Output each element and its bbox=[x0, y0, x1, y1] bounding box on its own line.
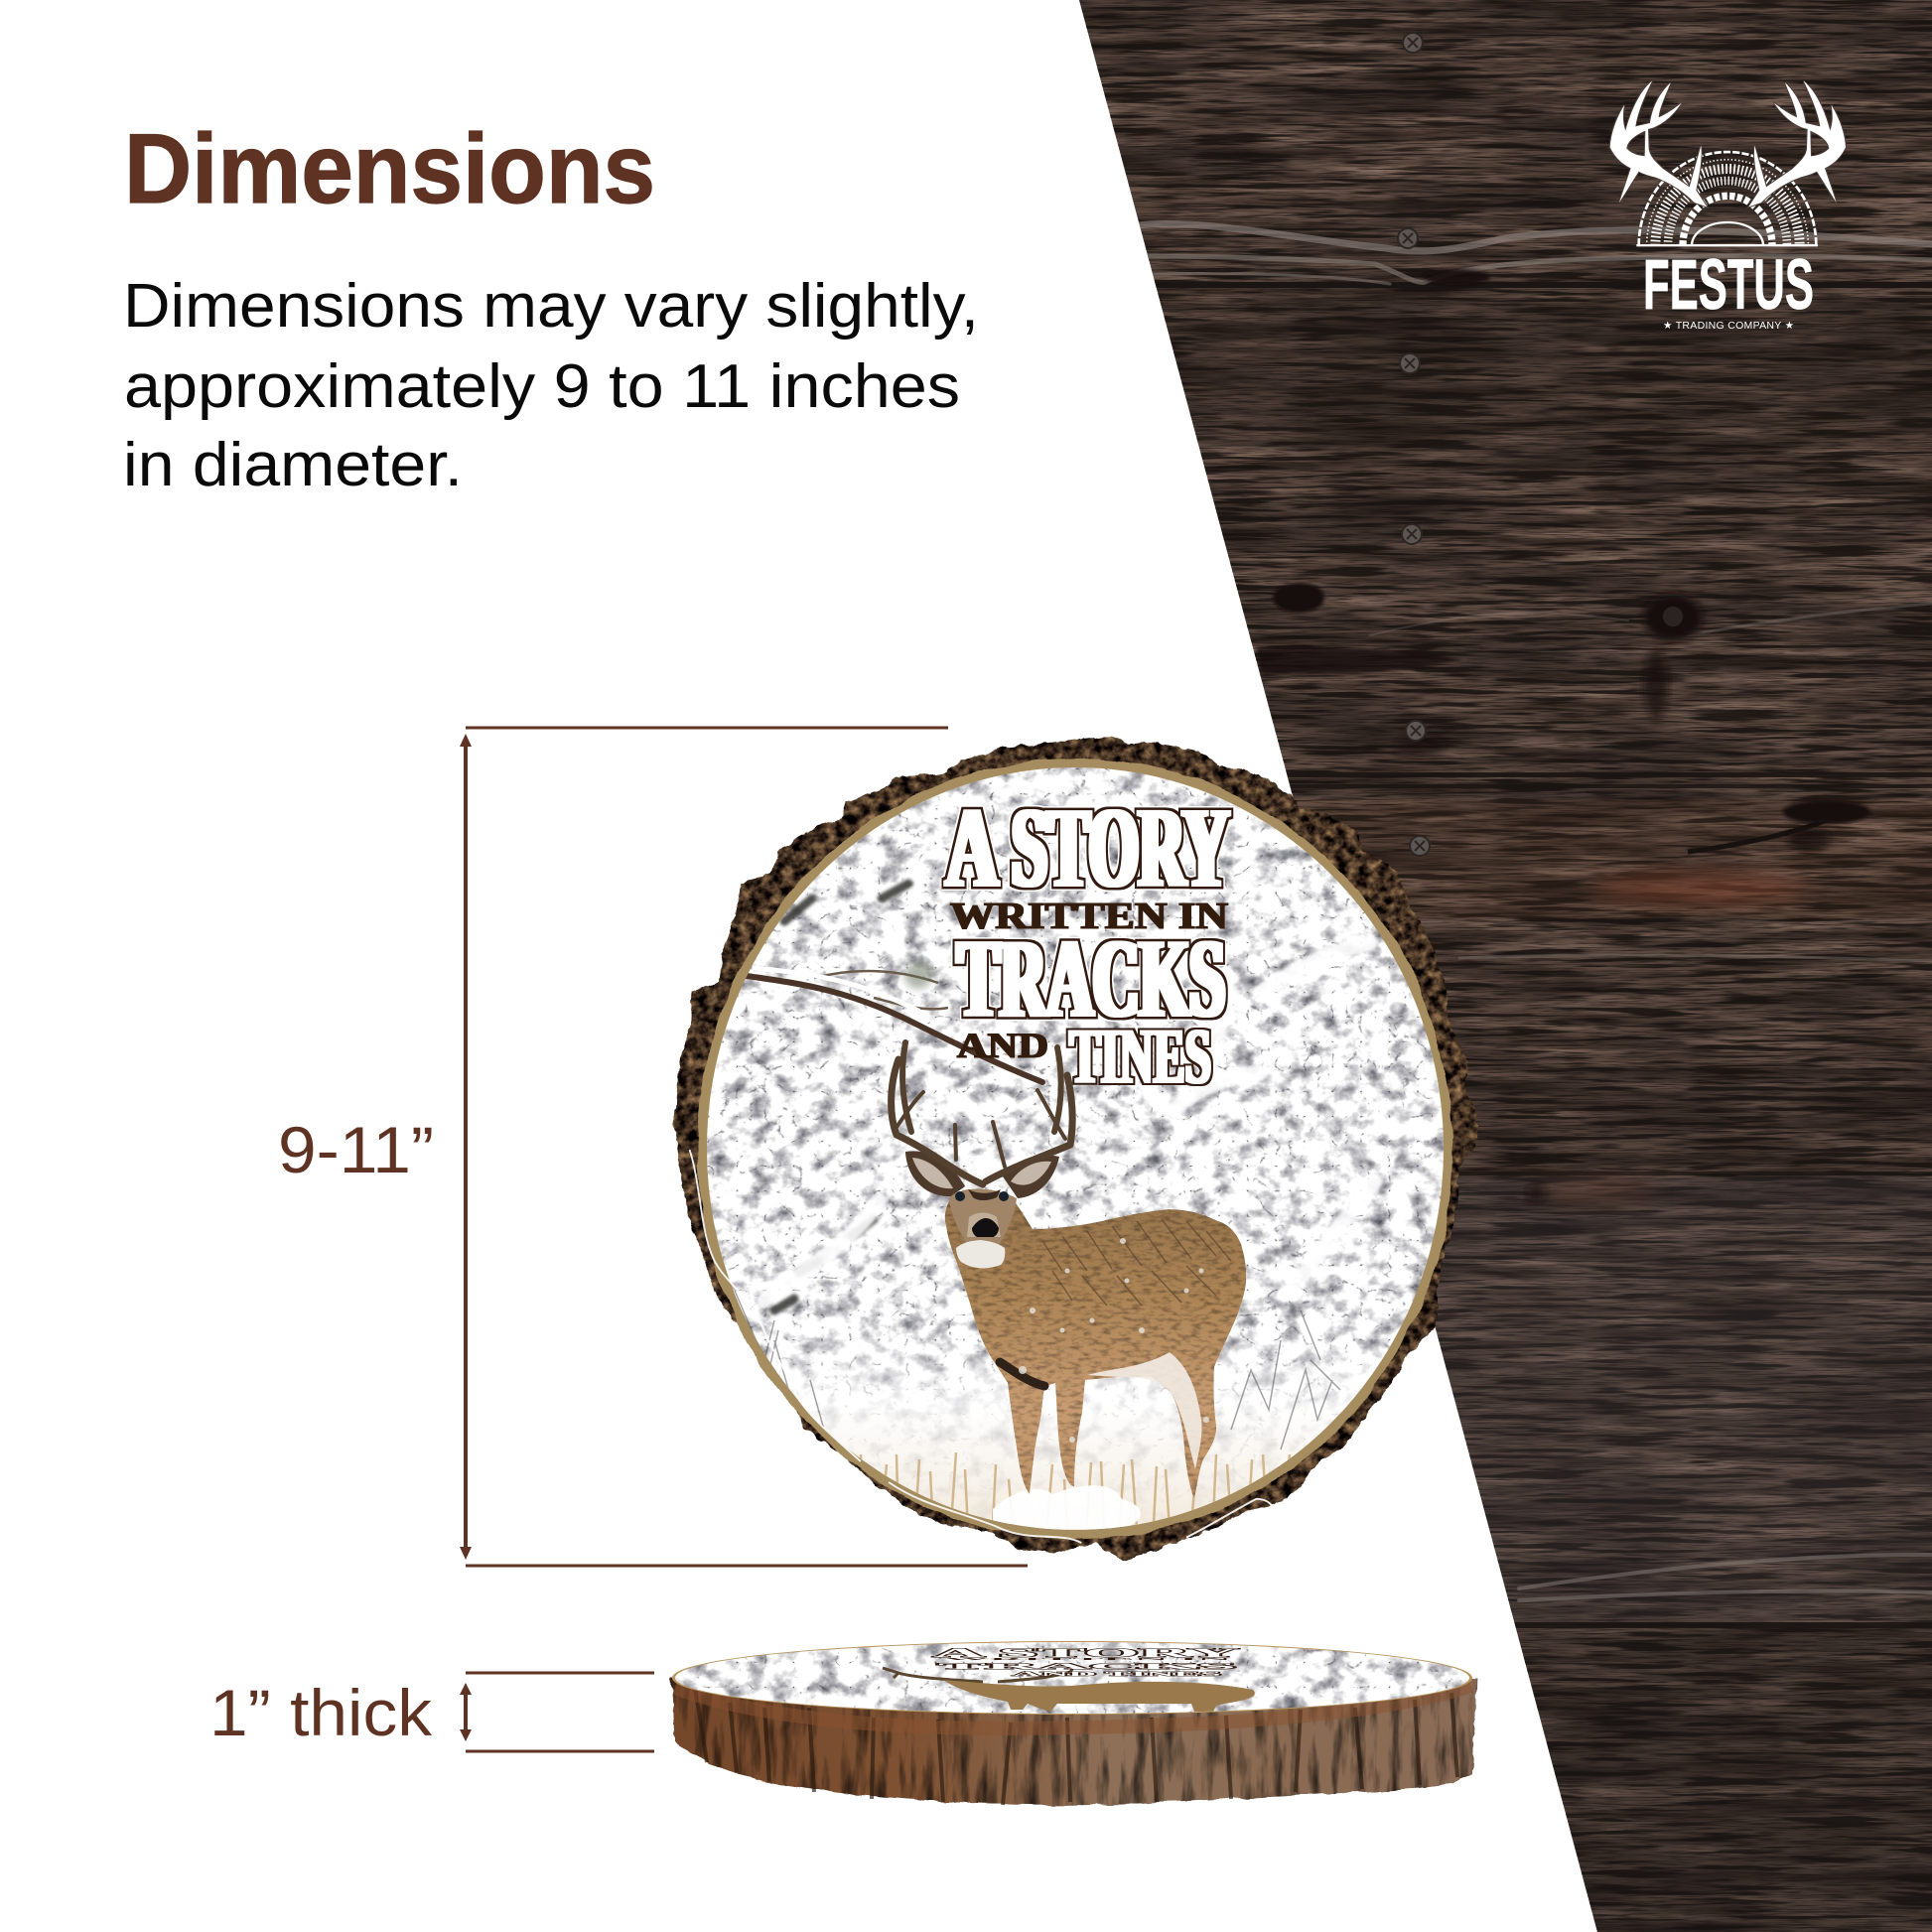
artwork text: A Story Written in Tracks and Tines: TRACKS bbox=[957, 917, 1225, 1040]
deer ears bbox=[905, 1151, 965, 1196]
orange-brown bark rim bbox=[675, 1686, 1471, 1728]
winter photo on slice bbox=[695, 755, 1459, 1549]
snow on deer head bbox=[965, 1163, 1009, 1185]
body text: in diameter. bbox=[123, 431, 463, 499]
snowy ground with grass bbox=[760, 1338, 1390, 1530]
knots bbox=[1256, 269, 1870, 1202]
squashed artwork text: AND TINES bbox=[1013, 1671, 1221, 1677]
deer nose bbox=[972, 1218, 999, 1237]
artwork text: A Story Written in Tracks and Tines: A bbox=[946, 784, 998, 910]
label: diameter: 9-11” bbox=[278, 1113, 434, 1186]
squashed artwork text: TRACKS bbox=[938, 1661, 1236, 1671]
deer white throat bbox=[956, 1240, 1005, 1268]
snowy background texture bbox=[695, 755, 1459, 1549]
deer eyes bbox=[955, 1191, 965, 1201]
deer antlers bbox=[892, 1042, 1072, 1184]
falling snowflakes bbox=[1019, 1238, 1209, 1452]
icon: tree slice and antlers bbox=[1610, 81, 1846, 246]
label: thickness: 1” thick bbox=[209, 1676, 433, 1749]
artwork text: A Story Written in Tracks and Tines: STORY bbox=[1012, 784, 1229, 910]
bare twigs bbox=[735, 1291, 1340, 1449]
snow boughs bbox=[764, 943, 1375, 1301]
artwork text: A Story Written in Tracks and Tines: AND bbox=[957, 1026, 1048, 1065]
pale ridges in the grain bbox=[1132, 223, 1932, 1600]
screws bbox=[1398, 33, 1682, 856]
slice top surface bbox=[672, 1641, 1472, 1715]
snow clumps near ground bbox=[993, 1485, 1141, 1529]
tan sapwood ring bbox=[698, 759, 1452, 1539]
product: wood slice front view bbox=[674, 736, 1477, 1562]
artwork text: A Story Written in Tracks and Tines bbox=[946, 784, 1229, 1099]
squashed artwork text bbox=[933, 1646, 1239, 1677]
deer dark back fur bbox=[1042, 1219, 1231, 1306]
bark side bbox=[671, 1678, 1476, 1805]
deer dark neck tuft bbox=[1000, 1362, 1044, 1386]
logo wordmark: FESTUS bbox=[1643, 246, 1814, 325]
product: wood slice side view bbox=[671, 1638, 1476, 1805]
resin highlights along bark bbox=[690, 1151, 1278, 1543]
deer white underbelly bbox=[1087, 1352, 1202, 1469]
snowy top texture bbox=[671, 1638, 1475, 1718]
dimension: diameter bracket and arrow bbox=[460, 728, 1028, 1566]
logo: Festus Trading Company bbox=[1610, 81, 1846, 332]
plank seams bbox=[1072, 282, 1932, 1628]
body text bbox=[123, 272, 979, 499]
dark shadows under snowy boughs bbox=[774, 884, 908, 1311]
panel: dark wood planks bbox=[1072, 0, 1932, 1932]
bark cracks bbox=[695, 1688, 1457, 1805]
bark edge bbox=[674, 736, 1477, 1562]
squashed deer on top bbox=[883, 1668, 1255, 1712]
artwork text: A Story Written in Tracks and Tines: TINES bbox=[1069, 1013, 1211, 1099]
logo tagline: ★ TRADING COMPANY ★ bbox=[1663, 320, 1795, 332]
body text: approximately 9 to 11 inches bbox=[124, 352, 960, 421]
deer body bbox=[945, 1189, 1246, 1499]
deer head bbox=[949, 1189, 1017, 1248]
title: Dimensions bbox=[124, 113, 655, 223]
squashed artwork text: A STORY bbox=[933, 1646, 1239, 1660]
branch with snow bbox=[740, 975, 1042, 1082]
deer bbox=[892, 1042, 1246, 1499]
dimension: thickness bracket and arrow bbox=[460, 1673, 654, 1751]
artwork text: A Story Written in Tracks and Tines: WRITTEN IN bbox=[950, 896, 1228, 937]
body text: Dimensions may vary slightly, bbox=[123, 272, 979, 341]
squashed artwork text: WRITTEN IN bbox=[943, 1658, 1234, 1661]
